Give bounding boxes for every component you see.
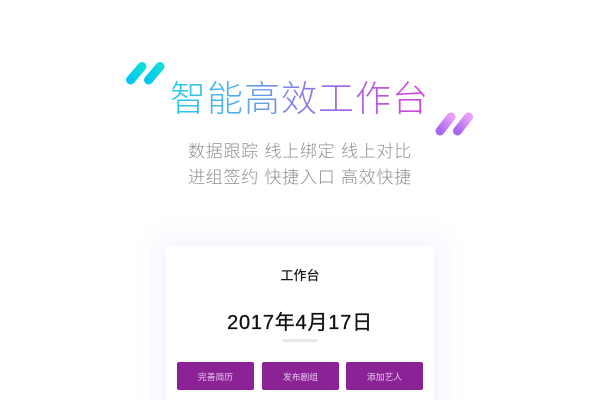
button: complete resume: [177, 362, 254, 390]
card heading: 工作台: [280, 268, 320, 283]
date: 2017年4月17日: [227, 312, 373, 334]
button: add artist: 添加艺人: [367, 372, 402, 382]
button: publish crew: 发布剧组: [283, 372, 318, 382]
date underline: [282, 339, 318, 342]
subtitle line one: 数据跟踪 线上绑定 线上对比: [188, 142, 412, 161]
icon: purple quotation bars: [436, 112, 473, 136]
button: complete resume: 完善简历: [198, 372, 233, 382]
button: add artist: [346, 362, 423, 390]
title: 智能高效工作台: [170, 78, 429, 119]
icon: cyan quotation bars: [126, 62, 164, 84]
subtitle line two: 进组签约 快捷入口 高效快捷: [188, 168, 412, 187]
button: publish crew: [262, 362, 339, 390]
panel: workbench card: [166, 246, 434, 400]
